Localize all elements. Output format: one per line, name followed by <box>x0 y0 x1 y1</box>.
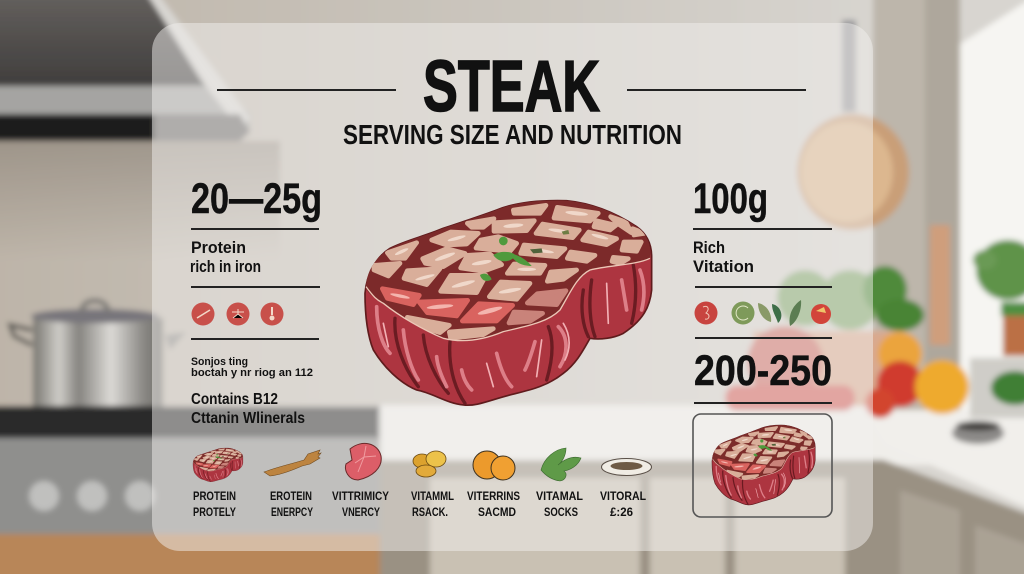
item: spinach: SOCKS <box>544 507 578 519</box>
stat: 20-25g: 20—25g <box>191 175 322 223</box>
item: plate <box>600 458 652 519</box>
right column: serving <box>693 175 832 517</box>
icons: vitamins row <box>694 300 831 326</box>
text: protein rich in iron: Protein <box>191 238 246 257</box>
text: contains B12: Cttanin Wlinerals <box>191 410 305 427</box>
item: ham slice: VITTRIMICY <box>332 491 389 503</box>
text: contains B12: Contains B12 <box>191 391 278 408</box>
bottom icon row <box>193 443 652 519</box>
stat: 200-250: 200-250 <box>694 347 832 395</box>
main steak illustration <box>365 201 652 405</box>
item: oranges <box>467 451 520 519</box>
small text <box>191 356 313 379</box>
item: spinach <box>536 448 583 519</box>
left column: protein <box>190 175 322 427</box>
item: yellow fruit: VITAMML <box>411 491 454 503</box>
item: ham slice: VNERCY <box>342 507 380 519</box>
item: oranges: VITERRINS <box>467 491 520 503</box>
title: STEAK <box>423 47 600 127</box>
text: rich vitation <box>693 238 754 276</box>
item: yellow fruit <box>411 451 454 519</box>
subtitle: SERVING SIZE AND NUTRITION <box>343 119 682 150</box>
item: protein: PROTEIN <box>193 491 236 503</box>
item: fork: EROTEIN <box>270 491 312 503</box>
small text: boctah y nr riog an 112 <box>191 367 313 379</box>
text: protein rich in iron <box>190 238 261 276</box>
item: ham slice <box>332 443 389 519</box>
text: contains B12 <box>191 391 305 427</box>
item: plate: VITORAL <box>600 491 646 503</box>
item: yellow fruit: RSACK. <box>412 507 448 519</box>
item: protein <box>193 448 243 519</box>
item: fork: ENERPCY <box>271 507 313 519</box>
small text: Sonjos ting <box>191 356 248 368</box>
item: plate: £:26 <box>610 507 633 519</box>
item: fork <box>264 450 321 519</box>
item: oranges: SACMD <box>478 507 516 519</box>
stat: 100g: 100g <box>693 175 768 223</box>
text: protein rich in iron: rich in iron <box>190 257 261 276</box>
translucent panel <box>152 23 873 551</box>
text: rich vitation: Rich <box>693 238 725 257</box>
item: protein: PROTELY <box>193 507 236 519</box>
text: rich vitation: Vitation <box>693 257 754 276</box>
icons: three red nutrient circles <box>192 302 284 326</box>
item: spinach: VITAMAL <box>536 491 583 503</box>
framed steak thumbnail <box>693 414 832 517</box>
